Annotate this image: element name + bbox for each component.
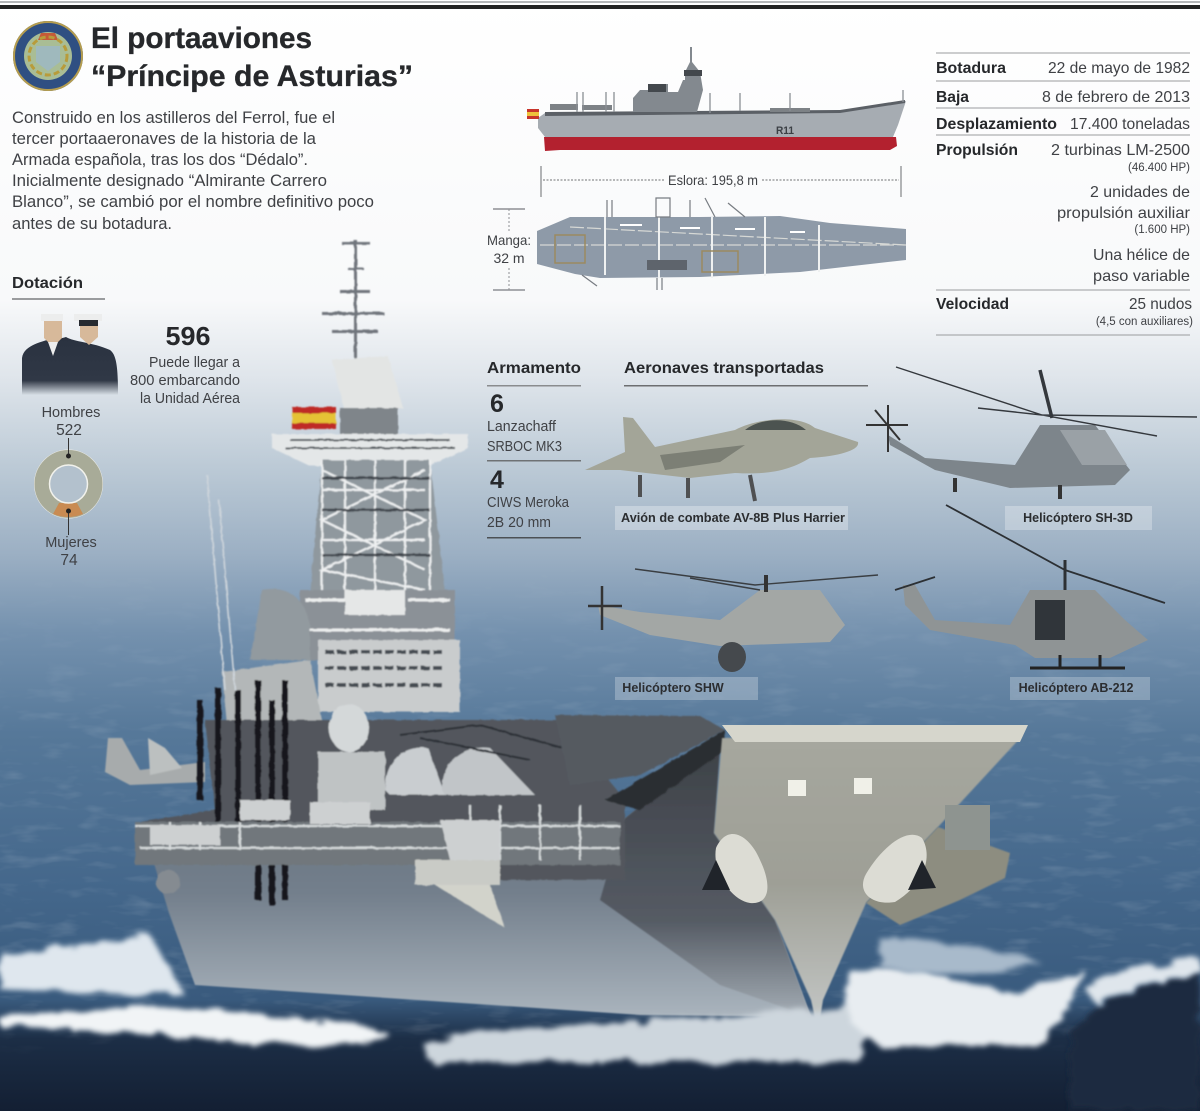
AB-212 label: Helicóptero AB-212 bbox=[1019, 681, 1133, 695]
panel: armamento: 2B 20 mm bbox=[487, 515, 551, 531]
aircraft: Harrier bbox=[585, 417, 858, 501]
helicopter: SHW bbox=[588, 569, 878, 672]
propulsion: Una hélice de bbox=[1093, 247, 1190, 264]
women: Mujeres bbox=[45, 535, 97, 551]
propulsion: paso variable bbox=[1093, 268, 1190, 285]
launch: 22 de mayo de 1982 bbox=[1048, 60, 1190, 77]
intro text: tercer portaaeronaves de la historia de la bbox=[12, 130, 317, 148]
panel: armamento: CIWS Meroka bbox=[487, 495, 570, 511]
ramp bbox=[605, 730, 725, 810]
intro text: Blanco”, se cambió por el nombre definitivo poco bbox=[12, 193, 374, 211]
intro text: Construido en los astilleros del Ferrol, fue el bbox=[12, 109, 335, 127]
beam dimension: 32 m bbox=[493, 250, 525, 266]
panel: armamento: Armamento bbox=[487, 360, 581, 377]
beam dimension bbox=[487, 209, 531, 290]
radar antenna bbox=[332, 356, 403, 412]
propulsion: (1.600 HP) bbox=[1134, 224, 1190, 236]
aircraft label bbox=[615, 506, 848, 530]
radome bbox=[329, 704, 369, 752]
decommission bbox=[936, 89, 1190, 106]
lattice tower bbox=[310, 460, 445, 590]
helicopter: AB-212 bbox=[895, 505, 1165, 668]
donut chart bbox=[34, 438, 103, 535]
intro text bbox=[12, 109, 374, 233]
propulsion: 2 turbinas LM-2500 bbox=[1051, 142, 1190, 159]
length dimension: Eslora: 195,8 m bbox=[668, 172, 758, 188]
speed: 25 nudos bbox=[1129, 296, 1192, 313]
SHW label bbox=[615, 677, 758, 700]
panel: aeronaves transportadas: Aeronaves transportadas bbox=[624, 360, 824, 377]
cables bbox=[200, 680, 285, 905]
propulsion: (46.400 HP) bbox=[1128, 162, 1190, 174]
windows bbox=[788, 778, 872, 796]
upper platform bbox=[340, 408, 398, 438]
parked helicopters bbox=[385, 747, 445, 795]
launch bbox=[936, 60, 1190, 77]
specifications table bbox=[936, 53, 1193, 335]
panel: armamento bbox=[487, 360, 581, 538]
panel: armamento: Lanzachaff bbox=[487, 419, 557, 435]
propulsion bbox=[936, 142, 1191, 285]
hawse pipes bbox=[715, 834, 927, 903]
panel: dotación: 74 bbox=[60, 552, 78, 569]
crest: Príncipe de Asturias bbox=[13, 21, 83, 91]
displacement: 17.400 toneladas bbox=[1070, 116, 1190, 133]
panel: dotación: Puede llegar a bbox=[149, 355, 241, 371]
AB-212 label bbox=[1010, 677, 1150, 700]
beam dimension: Manga: bbox=[487, 232, 531, 248]
SHW label: Helicóptero SHW bbox=[622, 681, 724, 695]
flight deck edge bbox=[722, 725, 1028, 742]
bow bbox=[714, 735, 1023, 1032]
superstructure bbox=[135, 240, 725, 928]
title: “Príncipe de Asturias” bbox=[91, 60, 413, 93]
propulsion: 2 unidades de bbox=[1090, 184, 1190, 201]
diagram: side elevation: R11 bbox=[776, 125, 794, 137]
icon: sailors bbox=[22, 314, 118, 395]
starboard walkway bbox=[866, 827, 1010, 925]
aircraft label: Avión de combate AV-8B Plus Harrier bbox=[621, 511, 845, 525]
panel: dotación: la Unidad Aérea bbox=[140, 391, 241, 407]
mast bbox=[322, 240, 384, 365]
hull shadow side bbox=[600, 743, 811, 1017]
launch: Botadura bbox=[936, 60, 1006, 77]
panel: dotación: 800 embarcando bbox=[130, 373, 240, 389]
title bbox=[91, 22, 413, 93]
panel: armamento: 6 bbox=[490, 390, 504, 418]
decommission: 8 de febrero de 2013 bbox=[1042, 89, 1190, 106]
diagram: side elevation bbox=[527, 47, 906, 151]
intro text: antes de su botadura. bbox=[12, 215, 172, 233]
SH-3D label: Helicóptero SH-3D bbox=[1023, 511, 1133, 525]
propulsion: propulsión auxiliar bbox=[1057, 205, 1191, 222]
panel: dotación: 522 bbox=[56, 422, 82, 439]
intro text: Inicialmente designado “Almirante Carrero bbox=[12, 172, 327, 190]
top rule bbox=[0, 1, 1200, 9]
panel: dotación bbox=[12, 275, 241, 569]
sea texture bbox=[0, 670, 1200, 1036]
men: Hombres bbox=[42, 405, 100, 421]
speed bbox=[936, 296, 1193, 328]
anchors bbox=[702, 860, 936, 890]
displacement: Desplazamiento bbox=[936, 116, 1057, 133]
aft harriers bbox=[105, 738, 205, 785]
panel: aeronaves transportadas bbox=[585, 360, 1197, 700]
Spanish flag bbox=[527, 109, 539, 119]
panel: armamento: SRBOC MK3 bbox=[487, 439, 562, 455]
bow wave and foam bbox=[0, 1007, 390, 1045]
SH-3D label bbox=[1005, 506, 1152, 530]
decommission: Baja bbox=[936, 89, 969, 106]
diagram: deck plan bbox=[537, 198, 906, 290]
flag bbox=[292, 407, 336, 429]
speed: Velocidad bbox=[936, 296, 1009, 313]
photo: aircraft carrier bbox=[0, 240, 1200, 1111]
propulsion: Propulsión bbox=[936, 142, 1018, 159]
total crew: 596 bbox=[166, 321, 210, 351]
length dimension bbox=[541, 166, 901, 197]
lower superstructure clutter bbox=[140, 720, 625, 880]
foam left of the hull bbox=[0, 935, 185, 995]
speed: (4,5 con auxiliares) bbox=[1096, 316, 1193, 328]
island block bbox=[300, 590, 455, 660]
panel: armamento: 4 bbox=[490, 466, 504, 494]
heading: Dotación bbox=[12, 275, 83, 292]
intro text: Armada española, tras los dos “Dédalo”. bbox=[12, 151, 308, 169]
hull side bbox=[150, 743, 811, 1017]
displacement bbox=[936, 116, 1190, 133]
gallery deck bbox=[135, 822, 620, 865]
helicopter: SH-3D bbox=[866, 367, 1197, 499]
title: El portaaviones bbox=[91, 22, 312, 55]
